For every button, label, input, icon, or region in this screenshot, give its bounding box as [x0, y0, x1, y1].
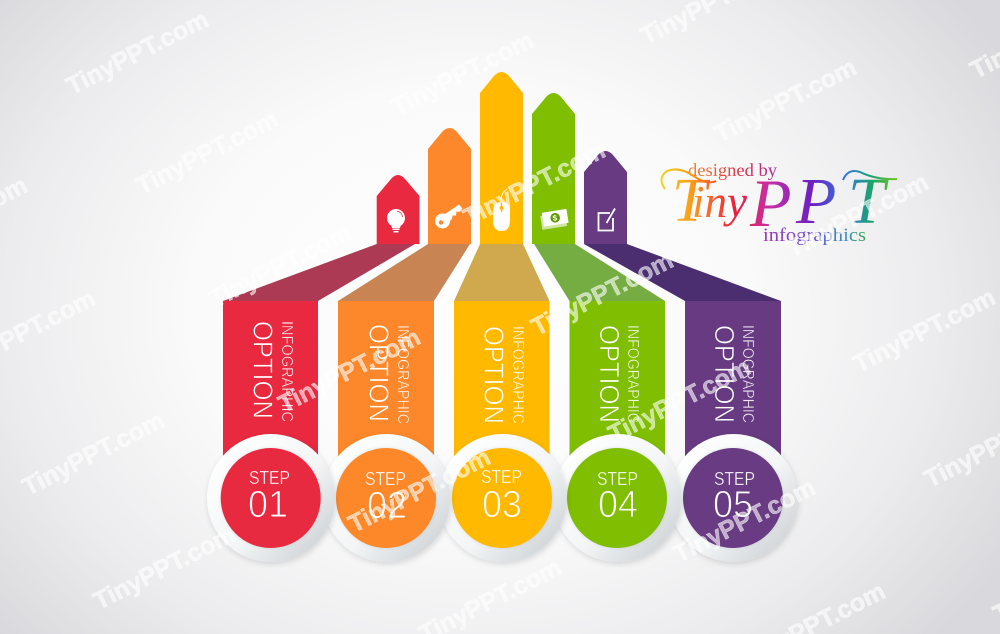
step circle: red: STEP: [249, 467, 290, 488]
watermark: TinyPPT.com repeated: TinyPPT.com: [782, 168, 933, 264]
arrow: yellow: [480, 72, 523, 244]
column text: yellow: [478, 326, 526, 424]
column text: orange: [364, 324, 411, 424]
icon: banknotes: $: [552, 213, 558, 223]
icon: key: [435, 204, 462, 228]
column text: red: INFOGRAPHIC: [278, 321, 295, 422]
icon: computer mouse: [493, 189, 510, 231]
arrow: green: [532, 93, 575, 244]
column text: red: [248, 321, 295, 422]
logo wordmark: Tiny PPT: T: [848, 165, 889, 238]
logo line: infographics: infographics: [763, 225, 866, 246]
step circle: yellow: STEP: [481, 466, 522, 487]
arrow: orange: [428, 128, 471, 244]
column text: purple: [709, 325, 756, 423]
ribbon fold: purple: [584, 244, 781, 301]
column text: orange: OPTION: [364, 324, 394, 422]
step circle: orange: [322, 434, 450, 562]
logo line: designed by: designed by: [688, 160, 777, 180]
column: green: [570, 301, 665, 471]
step circle: yellow: 03: [482, 484, 522, 526]
step 5 panel: purple: [584, 151, 798, 562]
step circle: green: STEP: [597, 468, 638, 489]
step circle: orange: 02: [367, 485, 407, 527]
watermark: TinyPPT.com repeated: TinyPPT.com: [459, 136, 610, 232]
column text: green: [594, 325, 641, 423]
column text: yellow: INFOGRAPHIC: [509, 326, 526, 424]
ribbon fold: orange: [338, 244, 470, 301]
watermark: TinyPPT.com repeated: TinyPPT.com: [527, 246, 678, 342]
step circle: orange: STEP: [365, 468, 406, 489]
column text: yellow: OPTION: [478, 326, 510, 424]
watermark: TinyPPT.com repeated: TinyPPT.com: [710, 53, 861, 149]
step 2 panel: orange: [322, 128, 471, 562]
column text: purple: INFOGRAPHIC: [739, 325, 756, 423]
step circle: green: [554, 434, 682, 562]
column text: orange: INFOGRAPHIC: [394, 325, 411, 424]
watermark: TinyPPT.com repeated: TinyPPT.com: [62, 5, 213, 101]
logo swashes: [661, 169, 897, 189]
column: red: [223, 301, 318, 471]
step circle: yellow: [438, 434, 566, 562]
arrow: red: [377, 175, 420, 244]
column text: green: OPTION: [594, 325, 625, 423]
column: purple: [685, 301, 781, 471]
ribbon fold: yellow: [454, 244, 550, 301]
step 3 panel: yellow: [438, 72, 566, 562]
watermark: TinyPPT.com repeated: TinyPPT.com: [344, 443, 495, 539]
logo wordmark: Tiny PPT: P: [749, 165, 792, 241]
column text: red: OPTION: [248, 321, 278, 419]
step 1 panel: red: [207, 175, 420, 562]
column: yellow: [454, 301, 550, 471]
watermark: TinyPPT.com repeated: TinyPPT.com: [669, 473, 820, 569]
step circle: red: [207, 434, 335, 562]
watermark: TinyPPT.com repeated: TinyPPT.com: [387, 26, 538, 122]
step circle: purple: STEP: [714, 468, 755, 489]
logo wordmark: Tiny PPT: T: [672, 167, 711, 235]
ribbon fold: green: [534, 244, 665, 301]
ribbon fold: red: [223, 244, 415, 301]
watermark: TinyPPT.com repeated: TinyPPT.com: [132, 105, 283, 201]
logo wordmark: Tiny PPT: P: [795, 165, 836, 238]
step circle: purple: [670, 434, 798, 562]
step circle: red: 01: [248, 484, 288, 526]
watermark: TinyPPT.com repeated: TinyPPT.com: [274, 323, 425, 419]
icon: light bulb: [387, 209, 405, 232]
watermark: TinyPPT.com repeated: TinyPPT.com: [89, 520, 240, 616]
watermark: TinyPPT.com repeated: TinyPPT.com: [849, 283, 1000, 379]
step 4 panel: green: [532, 93, 682, 562]
logo wordmark: Tiny PPT: iny: [692, 177, 747, 227]
arrow: purple: [584, 151, 627, 244]
icon: banknotes: [540, 209, 569, 230]
step circle: purple: 05: [713, 484, 753, 526]
column: orange: [338, 301, 434, 471]
watermark: TinyPPT.com repeated: TinyPPT.com: [604, 353, 755, 449]
watermark: TinyPPT.com repeated: TinyPPT.com: [18, 406, 169, 502]
watermark: TinyPPT.com repeated: TinyPPT.com: [205, 218, 356, 314]
step circle: green: 04: [598, 484, 638, 526]
icon: notepad and pen: [598, 208, 615, 230]
column text: green: INFOGRAPHIC: [624, 325, 641, 423]
column text: purple: OPTION: [709, 325, 740, 423]
logo: designed by TinyPPT infographics: [661, 160, 897, 246]
